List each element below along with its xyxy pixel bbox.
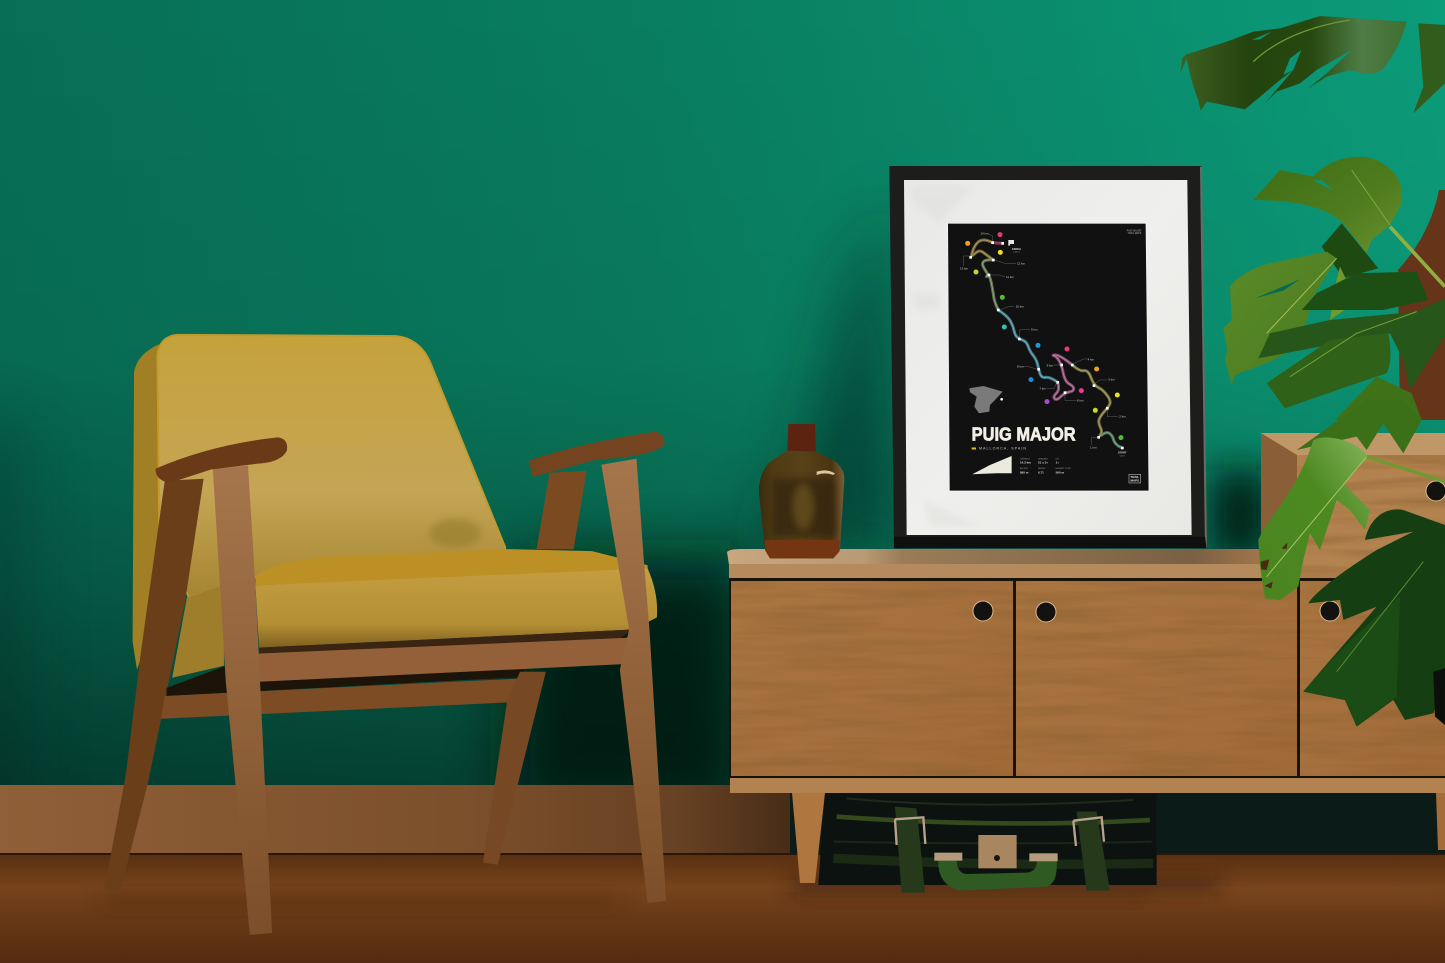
door handle holes <box>973 481 1445 622</box>
right strap <box>1077 812 1110 891</box>
front right leg <box>601 459 666 903</box>
upper drawer top slab <box>1261 433 1445 455</box>
km labels: 9 km <box>1031 328 1038 332</box>
lower back panel <box>172 585 224 678</box>
route statistics: GRADIENT <box>1038 457 1049 460</box>
green handle <box>934 853 1058 891</box>
route statistics: 560 m <box>1056 470 1064 474</box>
route statistics <box>1020 457 1072 474</box>
km labels <box>960 232 1126 449</box>
location with flag: MALLORCA, SPAIN <box>979 447 1026 451</box>
km labels: 5 km <box>1047 363 1054 367</box>
dark central leaf <box>1258 272 1445 408</box>
seat front <box>255 568 657 648</box>
dark hanging leaf <box>1303 509 1445 727</box>
leaf tips overlapping drawer <box>1297 400 1422 453</box>
bright top leaf <box>1253 157 1402 253</box>
route glow <box>972 240 1122 448</box>
right door <box>1300 581 1445 776</box>
km labels: 6 km <box>1077 399 1084 403</box>
lower crossbar <box>161 679 520 719</box>
poster top caption: PUIG MAJOR <box>1127 229 1142 232</box>
trail maps logo: TRAIL <box>1130 475 1139 479</box>
bottle highlight <box>817 470 835 475</box>
route statistics: 14.3 km <box>1020 460 1031 464</box>
trail maps logo: MAPS <box>1130 479 1139 483</box>
bottom rail <box>730 778 1445 793</box>
route statistics: 6.71 <box>1038 470 1044 474</box>
trail maps logo <box>1129 474 1141 483</box>
bottle inner shadow <box>772 478 837 537</box>
start label <box>1118 451 1127 457</box>
poster top caption: TRAIL MAPS <box>1128 232 1142 235</box>
case ridges <box>833 798 1153 864</box>
front left leg <box>213 466 272 935</box>
sideboard <box>727 433 1445 883</box>
right buckle <box>1073 817 1104 846</box>
route line <box>972 240 1122 448</box>
case body <box>818 793 1157 885</box>
upper drawer front <box>1297 433 1445 581</box>
armchair <box>104 335 666 935</box>
lower leaf fragment <box>1335 377 1422 420</box>
left buckle <box>895 817 925 845</box>
white mat <box>904 180 1192 535</box>
terracotta vase <box>1398 190 1445 420</box>
start label: 549 m <box>1120 455 1125 457</box>
bright hanging leaf <box>1258 437 1370 600</box>
km labels: 11 km <box>1006 275 1014 279</box>
rear left leg <box>104 479 204 891</box>
right rear upper leg <box>537 471 587 549</box>
stem <box>1367 457 1445 482</box>
right sideboard leg <box>1436 793 1445 850</box>
km labels: 2 km <box>1119 414 1126 418</box>
map of Spain <box>969 386 1003 413</box>
finish flag and label: FINISH <box>1012 247 1021 251</box>
carcass backing <box>729 578 1445 779</box>
shaded dark lobe <box>1322 223 1378 278</box>
sideboard top surface <box>727 549 1275 565</box>
bottle glow <box>793 483 814 530</box>
km labels: 3 km <box>1108 378 1115 382</box>
cushion shadow <box>429 519 481 547</box>
km labels: 14 km <box>980 232 989 236</box>
picture frame <box>889 166 1207 548</box>
finish flag and label <box>1008 240 1021 254</box>
amber glass bottle <box>759 424 844 558</box>
top right leaf lobe <box>1413 23 1445 113</box>
upper drawer side <box>1261 433 1301 549</box>
poster <box>948 223 1149 491</box>
left door <box>731 581 1013 776</box>
faint mat texture <box>910 187 980 527</box>
bottle neck <box>787 424 816 453</box>
bottle body <box>759 451 844 558</box>
km markers <box>969 241 1124 449</box>
monstera plant upper <box>1180 16 1445 420</box>
route statistics: DISTANCE <box>1020 457 1031 460</box>
elevation profile <box>972 456 1012 474</box>
right rear lower leg <box>483 672 546 865</box>
coloured km dots <box>965 232 1123 440</box>
under-seat gap <box>167 666 524 696</box>
upper crossbar <box>257 638 631 682</box>
light left leaf <box>1223 252 1357 385</box>
briefcase <box>818 793 1157 893</box>
seat top <box>255 549 648 585</box>
route statistics: 21 x 3+ <box>1038 460 1048 464</box>
stem <box>1390 227 1445 287</box>
km leader lines <box>963 234 1118 445</box>
km labels: 10 km <box>1016 305 1024 309</box>
poster top caption <box>1127 229 1142 235</box>
chair back cushion <box>157 335 505 597</box>
left armrest <box>156 437 287 483</box>
route statistics: 895 m <box>1020 470 1029 474</box>
km labels: 12 km <box>1017 261 1026 265</box>
bottle base <box>765 540 840 558</box>
route statistics: KM <box>1056 458 1059 460</box>
under-seat shadow <box>259 630 633 654</box>
top leaf <box>1180 16 1407 111</box>
route statistics: 1+ <box>1056 460 1059 464</box>
monstera plant lower <box>1258 400 1445 727</box>
left sideboard leg <box>792 793 825 883</box>
sideboard top edge <box>729 564 1289 579</box>
black pot edge <box>1433 668 1445 725</box>
km labels: 8 km <box>1017 365 1024 369</box>
brass lock <box>978 835 1017 868</box>
km labels: 4 km <box>1088 358 1095 362</box>
wooden floor <box>0 853 1445 963</box>
route statistics: RATING <box>1038 467 1046 470</box>
title: PUIG MAJOR <box>972 423 1076 444</box>
middle door <box>1016 581 1297 776</box>
start label: START <box>1118 451 1127 455</box>
finish flag and label: 1,445 m <box>1013 252 1020 254</box>
shadowed wall under the sideboard <box>790 790 1445 855</box>
left strap <box>895 807 925 893</box>
route core <box>972 240 1122 448</box>
route statistics: ASCENT <box>1020 467 1029 470</box>
km labels: 1 km <box>1090 445 1097 449</box>
chair back side <box>133 344 161 670</box>
route statistics: HIGHEST POINT <box>1056 468 1072 470</box>
km labels: 13 km <box>960 267 969 271</box>
right armrest <box>528 432 665 477</box>
km labels: 7 km <box>1039 387 1046 391</box>
skirting board <box>0 785 830 855</box>
